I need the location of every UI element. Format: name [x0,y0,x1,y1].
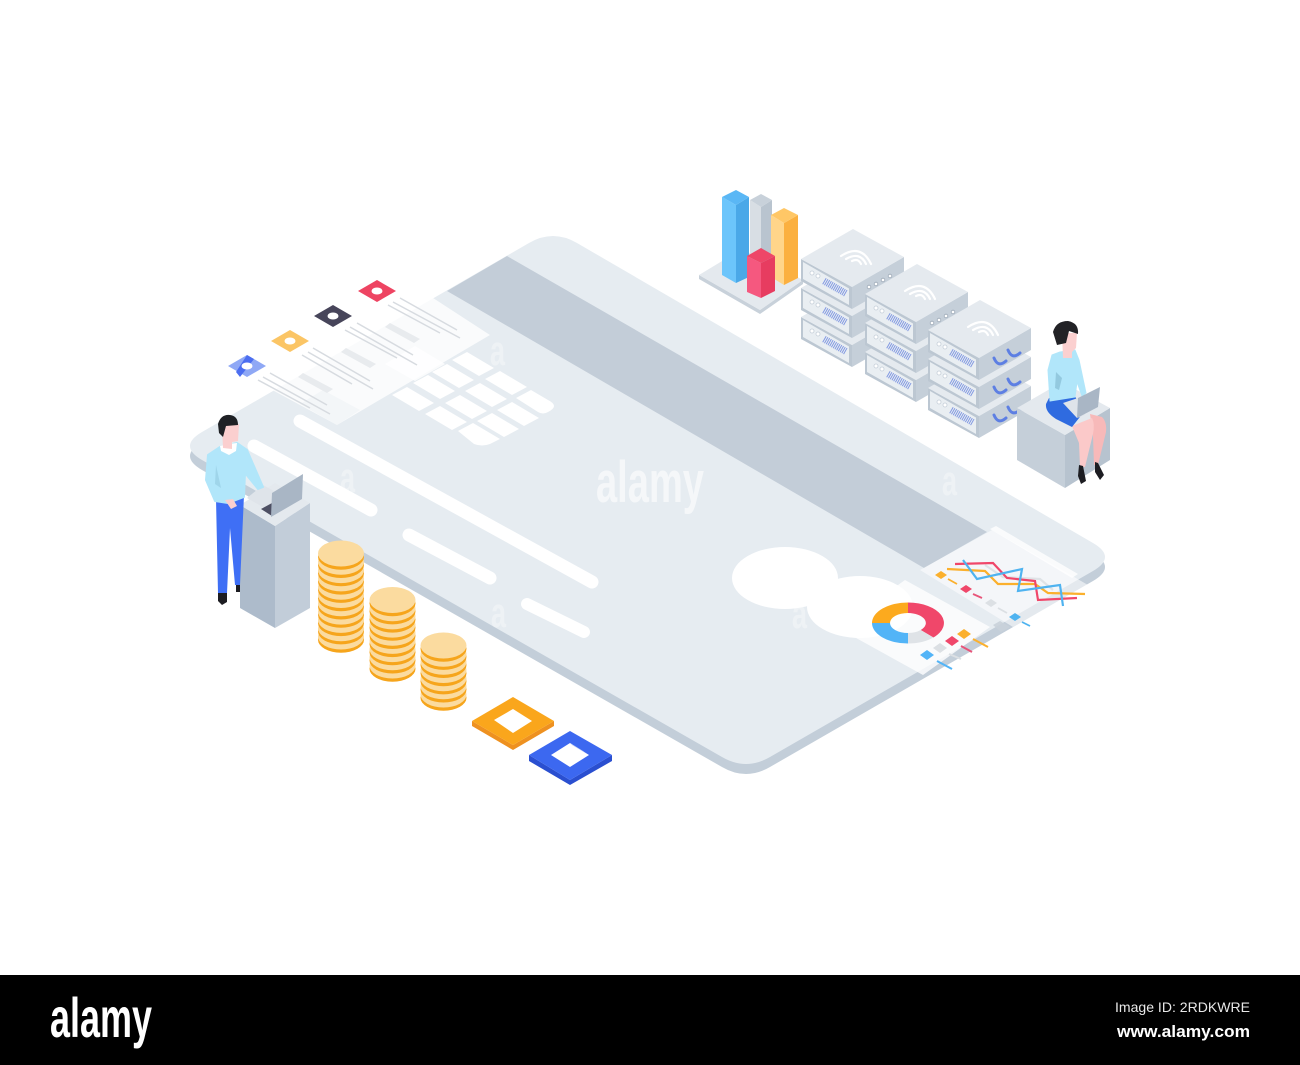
blue tile [529,731,612,785]
orange tile [472,697,554,750]
server rack: middle [865,264,968,402]
text lines: yellow row [302,348,373,389]
card number bars [254,421,592,632]
grey row bars [298,323,420,393]
skirt [1046,396,1083,427]
blouse [1048,350,1086,401]
bar: red [747,248,775,298]
sweater [206,443,263,503]
hair [218,415,238,437]
bar: grey [750,194,772,290]
hair [1053,321,1078,345]
legs [1072,414,1106,467]
server rack: front [928,300,1031,438]
credit card base [190,236,1105,774]
man with laptop [206,415,310,628]
coins: left stack [318,540,364,653]
table panel [250,270,490,425]
text lines: blue row [258,373,330,414]
footer logo: alamy [50,986,152,1049]
chart lines [947,560,1085,606]
footer bar [0,975,1300,1065]
text lines: red row [388,298,460,338]
watermark [340,327,957,637]
coins: middle stack [370,587,416,682]
face [1062,333,1077,358]
trousers [216,495,244,593]
hand [225,499,237,509]
seat box [1017,382,1110,488]
chart legend [935,571,1030,626]
watermark: alamy [596,450,704,515]
watermark: a [792,590,807,637]
watermark: a [942,457,957,504]
website: www.alamy.com [1116,1022,1250,1041]
panel: donut chart [838,580,1010,675]
bar: yellow [771,208,798,285]
icon: dark tile [314,305,352,327]
panel: line chart [920,526,1088,627]
watermark: a [490,327,505,374]
coins: right stack [420,632,466,711]
image id: Image ID: 2RDKWRE [1115,999,1250,1015]
platform [699,249,803,314]
icon: yellow tile [271,330,309,352]
list rows with icons [228,280,460,414]
bar: blue [722,190,749,283]
icon: red tile [358,280,396,302]
shoes [1078,462,1104,484]
text lines: dark row [345,323,417,365]
laptop [1063,387,1100,418]
icon: blue tile [228,355,266,377]
card logo circles [732,547,913,638]
donut legend [920,629,988,669]
coin stacks [318,540,466,711]
watermark: a [491,589,506,636]
magnetic stripe [447,256,987,568]
collar [220,443,237,455]
podium [240,483,310,628]
watermark: a [340,454,355,501]
laptop [247,474,303,517]
head [222,424,239,449]
bar chart on platform [699,190,803,314]
donut [872,602,944,644]
shoes [218,584,240,605]
server rack: back [801,229,904,367]
chip grid [392,352,554,446]
woman on laptop [1017,321,1110,488]
